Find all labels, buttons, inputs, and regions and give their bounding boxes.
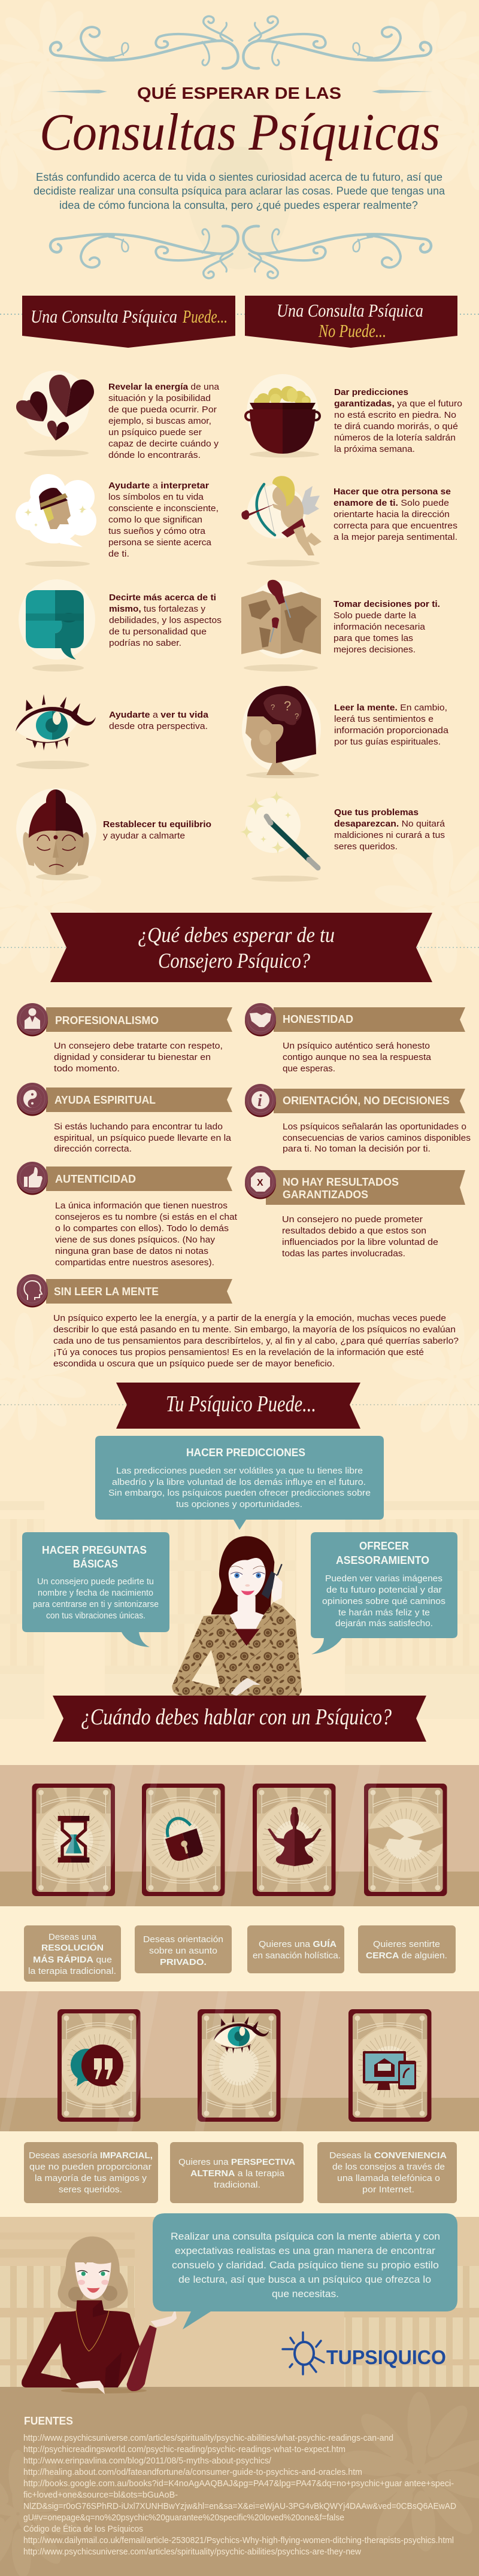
- text: tomar decisiones: para que tomes las: [334, 633, 413, 643]
- item: ayuda espiritual: Si estás luchando para encontrar tu lado: [54, 1122, 223, 1132]
- icon: stop x: X: [257, 1178, 263, 1188]
- speech bubble: ofrecer asesoramiento: [311, 1532, 457, 1654]
- text: revelar: dónde lo encontrarás.: [108, 450, 201, 460]
- icon: cupid: [241, 476, 322, 566]
- box: guía: Quieres una GUÍA: [259, 1939, 336, 1949]
- box: perspectiva: [170, 2142, 304, 2203]
- icon: head with brain: ?: [295, 712, 299, 721]
- item: autenticidad: compartidas entre nuestros asesores).: [55, 1257, 214, 1268]
- box: privado: [135, 1925, 232, 1973]
- item: honestidad: Un psíquico auténtico será honesto: [283, 1041, 430, 1051]
- reflections band 1: [86, 1765, 380, 1906]
- icon: eye: [16, 694, 96, 769]
- box: conveniencia: Deseas la CONVENIENCIA: [329, 2150, 447, 2161]
- text: ayudarte a interpretar: persona se siente acerca: [108, 537, 212, 548]
- banner: no puede: No Puede...: [318, 320, 386, 341]
- icon: thumbs up: [24, 1167, 43, 1187]
- illustration: psychic woman on phone: [172, 1536, 302, 1698]
- speech bubble: hacer preguntas básicas: con tus vibraciones únicas.: [46, 1611, 145, 1621]
- icon: magic wand: [240, 791, 319, 882]
- item: sin leer la mente: describir lo que está pasando en tu mente. Sin embargo, la mayoría de los psíquicos no evalúan: [53, 1325, 456, 1335]
- dotted divider: [0, 947, 479, 948]
- banner: tu psíquico puede: Tu Psíquico Puede...: [166, 1392, 316, 1417]
- item: sin leer la mente: [17, 1274, 459, 1369]
- sources list: http://books.google.com.au/books?id=K4noAgAAQBAJ&pg=PA47&lpg=PA47&dq=no+psychic+guar antee+speci-: [23, 2479, 454, 2489]
- text: que tus problemas: desaparezcan. No quitará: [334, 819, 445, 829]
- box: privado: sobre un asunto: [149, 1946, 217, 1956]
- box: privado: PRIVADO.: [160, 1957, 207, 1967]
- text: que tus problemas: maldiciones ni curará a tus: [334, 830, 445, 840]
- text: tomar decisiones: Solo puede darte la: [334, 610, 417, 621]
- text: dar predicciones: no está escrito en piedra. No: [334, 410, 456, 420]
- item: profesionalismo: PROFESIONALISMO: [55, 1014, 159, 1026]
- item: autenticidad: viene de sus dones psíquicos. (No hay: [55, 1235, 216, 1245]
- text: ayudarte a ver: Ayudarte a ver tu vida: [109, 710, 209, 720]
- banner: qué debes esperar: Consejero Psíquico?: [158, 949, 310, 973]
- icon: puzzle speech bubble: [19, 579, 95, 672]
- text: hacer que otra persona: a la mejor pareja sentimental.: [334, 532, 457, 542]
- item: sin leer la mente: SIN LEER LA MENTE: [54, 1286, 159, 1298]
- illustration: blonde woman: [22, 2237, 177, 2394]
- item: no hay resultados: GARANTIZADOS: [283, 1189, 368, 1201]
- speech bubble: closing advice: de lectura, así que busca a un psíquico que ofrezca lo: [178, 2274, 431, 2285]
- banner: puede: Una Consulta Psíquica: [31, 306, 177, 327]
- intro paragraph: Estás confundido acerca de tu vida o sientes curiosidad acerca de tu futuro, así que: [36, 171, 442, 183]
- banner: puede: Puede...: [182, 306, 228, 327]
- banner: tu psíquico puede: [116, 1383, 360, 1429]
- card: meditation silhouette: [253, 1784, 335, 1896]
- speech bubble: ofrecer asesoramiento: dejarán más satisfecho.: [335, 1618, 433, 1629]
- text: hacer que otra persona: [334, 487, 457, 542]
- banner: qué debes esperar: ¿Qué debes esperar de tu: [138, 923, 335, 947]
- item: ayuda espiritual: espiritual, un psíquico puede llevarte en la: [54, 1133, 232, 1143]
- sources list: NlZD&sig=r0oG76SPhRD-iUxl7XUNHBwYzjw&hl=en&sa=X&ei=eWjAU-3PG4vBkQWYj4DAAw&ved=0CBsQ6AEwAD: [23, 2502, 456, 2511]
- banner: puede: [22, 296, 235, 348]
- item: honestidad: contigo aunque no sea la respuesta: [283, 1052, 432, 1062]
- speech bubble: hacer preguntas básicas: HACER PREGUNTAS: [42, 1544, 147, 1556]
- box: guía: [247, 1925, 344, 1973]
- item: honestidad: [245, 1003, 465, 1074]
- box: perspectiva: tradicional.: [214, 2180, 260, 2190]
- text: leer la mente: Leer la mente. En cambio,: [334, 703, 447, 713]
- box: imparcial: la mayoría de tus amigos y: [35, 2173, 147, 2183]
- text: decirte más: Decirte más acerca de ti: [109, 593, 216, 603]
- item: no hay resultados: NO HAY RESULTADOS: [283, 1176, 399, 1188]
- item: no hay resultados: [245, 1166, 465, 1259]
- text: ayudarte a interpretar: [108, 481, 219, 559]
- text: leer la mente: [334, 703, 449, 747]
- icon: info: i: [257, 1092, 262, 1110]
- text: revelar: un psíquico puede ser: [108, 427, 202, 438]
- icon: person: [25, 1008, 40, 1029]
- text: hacer que otra persona: Hacer que otra persona se: [334, 487, 451, 497]
- item: autenticidad: AUTENTICIDAD: [55, 1173, 136, 1185]
- box: imparcial: seres queridos.: [59, 2185, 122, 2195]
- text: revelar: capaz de decirte cuándo y: [108, 439, 219, 449]
- speech bubble: hacer predicciones: [95, 1436, 384, 1530]
- text: decirte más: [109, 593, 222, 648]
- speech bubble: ofrecer asesoramiento: Pueden ver varias imágenes: [325, 1573, 442, 1584]
- card: computer and phone: [348, 2009, 431, 2122]
- speech bubble: hacer predicciones: albedrío y la libre voluntad de los demás influye en el futuro.: [112, 1477, 366, 1487]
- speech bubble: hacer predicciones: tus opciones y oportunidades.: [176, 1499, 302, 1509]
- intro paragraph: decidiste realizar una consulta psíquica para aclarar las cosas. Puede que tengas una: [34, 185, 445, 197]
- sources list: http://www.psychicsuniverse.com/articles/spirituality/psychic-abilities/what-psychic-readings-can-and: [23, 2434, 393, 2443]
- item: orientación: para ti. No toman la decisión por ti.: [283, 1144, 431, 1154]
- text: restablecer: Restablecer tu equilibrio: [103, 819, 211, 830]
- banner: cuándo debes hablar: [53, 1696, 426, 1742]
- card: eye: [198, 2009, 280, 2122]
- item: profesionalismo: dignidad y considerar tu bienestar en: [54, 1052, 211, 1062]
- banner: qué debes esperar: [50, 913, 432, 982]
- speech bubble: ofrecer asesoramiento: te harán más feliz y te: [338, 1608, 430, 1618]
- sources list: gU#v=onepage&q=no%20psychic%20guarantee%20specific%20loved%20one&f=false: [23, 2513, 344, 2523]
- text: tomar decisiones: [334, 599, 440, 655]
- item: ayuda espiritual: AYUDA ESPIRITUAL: [54, 1094, 156, 1106]
- banner: cuándo debes hablar: ¿Cuándo debes hablar con un Psíquico?: [81, 1705, 392, 1730]
- ornament: top flourish: [50, 16, 431, 68]
- box: perspectiva: Quieres una PERSPECTIVA: [178, 2157, 295, 2167]
- intro paragraph: idea de cómo funciona la consulta, pero ¿qué puedes esperar realmente?: [59, 199, 418, 211]
- text: ayudarte a ver: desde otra perspectiva.: [109, 721, 208, 731]
- item: autenticidad: consejeros es tu nombre (si estás en el chat: [55, 1212, 238, 1222]
- sources list: [23, 2434, 456, 2557]
- library background: closing wall: [0, 2217, 479, 2387]
- item: no hay resultados: Un consejero no puede prometer: [282, 1214, 423, 1225]
- box: resolución: RESOLUCIÓN: [41, 1942, 104, 1953]
- speech bubble: ofrecer asesoramiento: de tu futuro potencial y dar: [326, 1585, 442, 1595]
- text: revelar: [108, 382, 220, 460]
- icon: stop x: [251, 1172, 270, 1192]
- text: revelar: de que pueda ocurrir. Por: [108, 405, 217, 415]
- speech bubble: hacer predicciones: Las predicciones pueden ser volátiles ya que tu tienes libre: [116, 1466, 363, 1476]
- text: tomar decisiones: Tomar decisiones por ti.: [334, 599, 440, 609]
- logo: tupsiquico: [283, 2332, 446, 2374]
- speech bubble: hacer preguntas básicas: para centrarse en ti y sintonizarse: [33, 1599, 159, 1609]
- icon: buddha head: [16, 788, 96, 880]
- item: orientación: [245, 1084, 471, 1154]
- item: sin leer la mente: ¡Tú ya conoces tus propios pensamientos! Es en la revelación de la información que esté: [53, 1347, 424, 1357]
- text: ayudarte a interpretar: consciente e inconsciente,: [108, 503, 219, 514]
- icon: info: [251, 1091, 269, 1110]
- text: hacer que otra persona: orientarte hacia la dirección: [334, 509, 450, 520]
- speech bubble: hacer predicciones: HACER PREDICCIONES: [186, 1447, 305, 1459]
- text: que tus problemas: [334, 807, 445, 852]
- icon: yin yang: [23, 1090, 41, 1108]
- item: orientación: ORIENTACIÓN, NO DECISIONES: [283, 1094, 450, 1107]
- speech bubble: hacer preguntas básicas: nombre y fecha de nacimiento: [38, 1588, 153, 1598]
- card: open padlock: [142, 1784, 225, 1896]
- item: honestidad: HONESTIDAD: [283, 1013, 353, 1025]
- banner: no puede: [245, 296, 457, 348]
- icon: handshake: [250, 1013, 271, 1027]
- decorative dash right: [372, 90, 433, 93]
- text: tomar decisiones: mejores decisiones.: [334, 645, 416, 655]
- text: restablecer: [103, 819, 211, 841]
- speech bubble: ofrecer asesoramiento: opiniones sobre qué caminos: [322, 1596, 445, 1606]
- item: honestidad: que esperas.: [283, 1064, 335, 1074]
- speech bubble: hacer predicciones: Sin embargo, los psíquicos pueden ofrecer predicciones sobre: [108, 1488, 371, 1498]
- item: ayuda espiritual: dirección correcta.: [54, 1144, 132, 1154]
- item: sin leer la mente: Un psíquico experto lee la energía, y a partir de la energía y la emoción, muchas veces puede: [53, 1313, 446, 1323]
- speech bubble: closing advice: [153, 2213, 457, 2329]
- item: sin leer la mente: cada uno de tus pensamientos para describírtelos, y, al fin y al cabo, ¿para qué querrías saberlo?: [53, 1336, 459, 1346]
- intro paragraph: [34, 171, 445, 211]
- band: tarot table row 1: [0, 1765, 479, 1906]
- footer background: [0, 2387, 479, 2576]
- box: resolución: la terapia tradicional.: [28, 1966, 116, 1976]
- dotted divider: [0, 1404, 479, 1405]
- icon: head with brain: [242, 686, 321, 778]
- speech bubble: closing advice: Realizar una consulta psíquica con la mente abierta y con: [171, 2231, 440, 2242]
- box: conveniencia: una llamada telefónica o: [337, 2173, 440, 2183]
- box: imparcial: que no pueden proporcionar: [29, 2162, 151, 2172]
- reflections band 2: [0, 1991, 320, 2131]
- text: dar predicciones: números de la lotería saldrán: [334, 433, 456, 443]
- icon: map with pins: [241, 580, 321, 672]
- item: profesionalismo: todo momento.: [54, 1064, 120, 1074]
- sources list: http://www.psychicsuniverse.com/articles/spirituality/psychic-abilities/psychics-are-they-new: [23, 2547, 361, 2557]
- speech bubble: closing advice: que necesitas.: [272, 2288, 339, 2299]
- box: conveniencia: por Internet.: [362, 2185, 414, 2195]
- text: dar predicciones: te dirá cuando morirás, o qué: [334, 421, 458, 432]
- text: ayudarte a ver: [109, 710, 209, 731]
- text: leer la mente: por tus guías espirituales.: [334, 737, 441, 747]
- card: hourglass: [32, 1784, 115, 1896]
- ornament: bottom flourish: [50, 226, 431, 278]
- box: resolución: [24, 1925, 121, 1982]
- text: leer la mente: información proporcionada: [334, 725, 449, 736]
- box: conveniencia: [317, 2142, 457, 2203]
- band: cream strip row 2: [0, 2131, 479, 2217]
- icon: head with brain: ?: [271, 703, 275, 712]
- item: sin leer la mente: escondida u oscura que un psíquico puede ser de mayor beneficio.: [53, 1359, 335, 1369]
- library background: consejera: [0, 1501, 479, 1719]
- speech bubble: hacer preguntas básicas: Un consejero puede pedirte tu: [37, 1576, 154, 1587]
- sources list: fic+loved+one&source=bl&ots=bGuAoB-: [23, 2490, 178, 2500]
- sources list: Código de Ética de los Psíquicos: [23, 2524, 143, 2534]
- text: ayudarte a interpretar: como lo que significan: [108, 515, 202, 525]
- item: no hay resultados: resultados debido a que estos son: [282, 1226, 426, 1236]
- item: autenticidad: o lo compartes con ellos). Todo lo demás: [55, 1223, 229, 1234]
- text: revelar: ejemplo, si buscas amor,: [108, 416, 211, 426]
- box: cerca: CERCA de alguien.: [366, 1951, 447, 1961]
- box: cerca: Quieres sentirte: [373, 1939, 440, 1949]
- text: hacer que otra persona: enamore de ti. Solo puede: [334, 498, 449, 508]
- text: restablecer: y ayudar a calmarte: [103, 831, 185, 841]
- box: imparcial: Deseas asesoría IMPARCIAL,: [29, 2150, 153, 2161]
- text: decirte más: de tu personalidad que: [109, 627, 207, 637]
- text: dar predicciones: Dar predicciones: [334, 387, 408, 397]
- banner: no puede: Una Consulta Psíquica: [277, 300, 423, 321]
- text: ayudarte a interpretar: Ayudarte a interpretar: [108, 481, 209, 491]
- item: autenticidad: [17, 1162, 238, 1268]
- icon: head outline: [24, 1281, 42, 1300]
- speech bubble: hacer preguntas básicas: BÁSICAS: [73, 1557, 118, 1570]
- band: tarot table row 2: [0, 1991, 479, 2131]
- text: ayudarte a interpretar: de ti.: [108, 549, 129, 559]
- speech bubble: ofrecer asesoramiento: OFRECER: [359, 1540, 409, 1552]
- title: QUÉ ESPERAR DE LAS: [137, 84, 341, 102]
- item: autenticidad: ninguna gran base de datos ni notas: [55, 1246, 208, 1256]
- text: que tus problemas: seres queridos.: [334, 842, 398, 852]
- text: ayudarte a interpretar: tus sueños y cómo otra: [108, 526, 206, 536]
- text: decirte más: mismo, tus fortalezas y: [109, 604, 206, 614]
- band: cream strip row 1: [0, 1906, 479, 1991]
- item: ayuda espiritual: [17, 1083, 232, 1154]
- sources heading: FUENTES: [24, 2415, 73, 2427]
- icon: thought bubble with head: [16, 474, 96, 567]
- item: no hay resultados: influenciados por la libre voluntad de: [282, 1237, 438, 1247]
- text: hacer que otra persona: correcta para que encuentres: [334, 521, 457, 531]
- item: orientación: consecuencias de varios caminos disponibles: [283, 1133, 471, 1143]
- decorative dash left: [46, 90, 107, 93]
- title: Consultas Psíquicas: [40, 104, 440, 162]
- card: reaching hands: [364, 1784, 447, 1896]
- box: privado: Deseas orientación: [143, 1934, 223, 1945]
- text: leer la mente: leerá tus sentimientos e: [334, 714, 433, 724]
- speech bubble: ofrecer asesoramiento: ASESORAMIENTO: [336, 1554, 429, 1566]
- sources list: http://www.erinpavlina.com/blog/2011/08/5-myths-about-psychics/: [23, 2456, 272, 2466]
- text: dar predicciones: garantizadas, ya que el futuro: [334, 399, 462, 409]
- item: profesionalismo: Un consejero debe tratarte con respeto,: [54, 1041, 223, 1051]
- text: decirte más: podrías no saber.: [109, 638, 181, 648]
- box: conveniencia: de los consejos a través de: [332, 2162, 445, 2172]
- item: autenticidad: La única información que tienen nuestros: [55, 1201, 228, 1211]
- logo: tupsiquico: TUPSIQUICO: [326, 2346, 446, 2368]
- box: imparcial: [24, 2142, 158, 2203]
- speech bubble: hacer preguntas básicas: [22, 1532, 169, 1647]
- item: profesionalismo: [17, 1003, 232, 1074]
- text: tomar decisiones: información necesaria: [334, 622, 426, 632]
- box: resolución: MÁS RÁPIDA que: [33, 1955, 112, 1965]
- dotted divider: [0, 314, 479, 315]
- text: dar predicciones: [334, 387, 462, 454]
- sources list: http://psychicreadingsworld.com/psychic-reading/psychic-readings-what-to-expect.htm: [23, 2445, 345, 2455]
- sources list: http://www.dailymail.co.uk/femail/article-2530821/Psychics-Why-high-flying-women-ditching-therapists-psychics.html: [23, 2536, 454, 2545]
- item: no hay resultados: todas las partes involucradas.: [282, 1248, 405, 1259]
- icon: hearts: [16, 370, 94, 456]
- box: resolución: Deseas una: [48, 1932, 97, 1942]
- background decoration: top leaves and burst: [0, 1, 479, 1441]
- card: speech bubbles: [57, 2009, 140, 2122]
- text: dar predicciones: la próxima semana.: [334, 444, 415, 454]
- box: perspectiva: ALTERNA a la terapia: [190, 2168, 285, 2179]
- box: cerca: [358, 1925, 456, 1973]
- box: guía: en sanación holística.: [253, 1951, 341, 1961]
- text: ayudarte a interpretar: los símbolos en tu vida: [108, 492, 204, 502]
- icon: head with brain: ?: [284, 698, 291, 713]
- text: revelar: Revelar la energía de una: [108, 382, 220, 392]
- icon: pot of gold: [245, 374, 320, 457]
- item: orientación: Los psíquicos señalarán las oportunidades o: [283, 1122, 466, 1132]
- speech bubble: closing advice: expectativas realistas es una gran manera de encontrar: [175, 2245, 435, 2256]
- text: revelar: situación y la posibilidad: [108, 393, 211, 403]
- text: que tus problemas: Que tus problemas: [334, 807, 419, 818]
- speech bubble: closing advice: consuelo y claridad. Cada psíquico tiene su propio estilo: [172, 2259, 439, 2271]
- text: decirte más: debilidades, y los aspectos: [109, 615, 222, 625]
- sources list: http://healing.about.com/od/fateandfortune/a/consumer-guide-to-psychics-and-oracles.htm: [23, 2468, 362, 2477]
